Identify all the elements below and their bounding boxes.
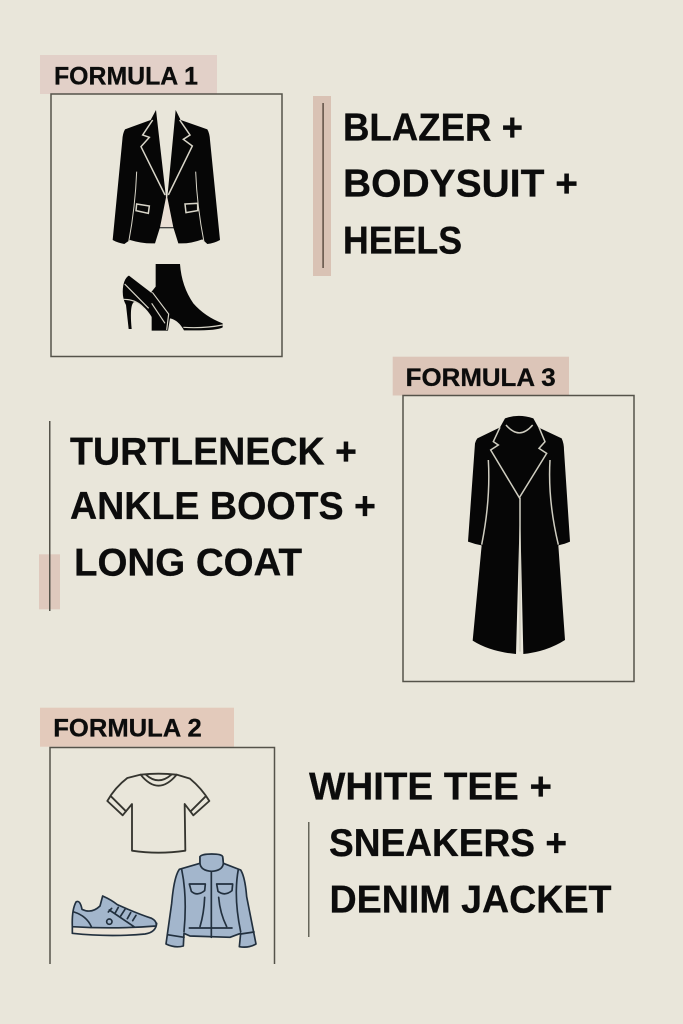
label tag: formula 1 bbox=[40, 55, 217, 94]
icon: black blazer bbox=[113, 110, 220, 244]
icon: black heels bbox=[123, 264, 223, 331]
icon: long black coat bbox=[468, 416, 570, 654]
text block: formula 2 items: DENIM JACKET bbox=[330, 879, 612, 922]
icon: denim jacket bbox=[166, 854, 256, 947]
panel: formula 1 bbox=[40, 55, 282, 356]
text block: formula 2 items: SNEAKERS + bbox=[329, 822, 567, 865]
label tag: formula 3 bbox=[393, 357, 569, 396]
panel: formula 3 bbox=[393, 357, 634, 682]
text block: formula 3 items: ANKLE BOOTS + bbox=[70, 485, 376, 528]
image frame: formula 1 bbox=[51, 94, 282, 356]
text block: formula 1 items bbox=[343, 107, 578, 262]
text block: formula 3 items bbox=[70, 430, 376, 585]
text block: formula 2 items bbox=[309, 765, 612, 922]
text block: formula 1 items: BODYSUIT + bbox=[343, 163, 578, 206]
icon: white t-shirt bbox=[107, 774, 209, 853]
text block: formula 2 items: WHITE TEE + bbox=[309, 765, 552, 808]
text block: formula 1 items: HEELS bbox=[343, 219, 462, 262]
label tag: formula 3: FORMULA 3 bbox=[406, 364, 556, 392]
accent bar: formula 1 text bbox=[313, 96, 331, 276]
image frame: formula 3 bbox=[403, 396, 634, 682]
label tag: formula 1: FORMULA 1 bbox=[54, 62, 198, 90]
label tag: formula 2 bbox=[40, 708, 234, 747]
text block: formula 1 items: BLAZER + bbox=[343, 107, 523, 150]
panel: formula 2 bbox=[40, 708, 274, 964]
side rule: formula 2 text bbox=[308, 822, 310, 937]
icon: blue sneaker bbox=[72, 896, 157, 936]
text block: formula 3 items: LONG COAT bbox=[74, 542, 302, 585]
text block: formula 3 items: TURTLENECK + bbox=[70, 430, 357, 473]
image frame: formula 2 (open bottom) bbox=[50, 748, 274, 964]
side rule and accent: formula 3 text bbox=[39, 421, 60, 611]
label tag: formula 2: FORMULA 2 bbox=[53, 715, 202, 743]
